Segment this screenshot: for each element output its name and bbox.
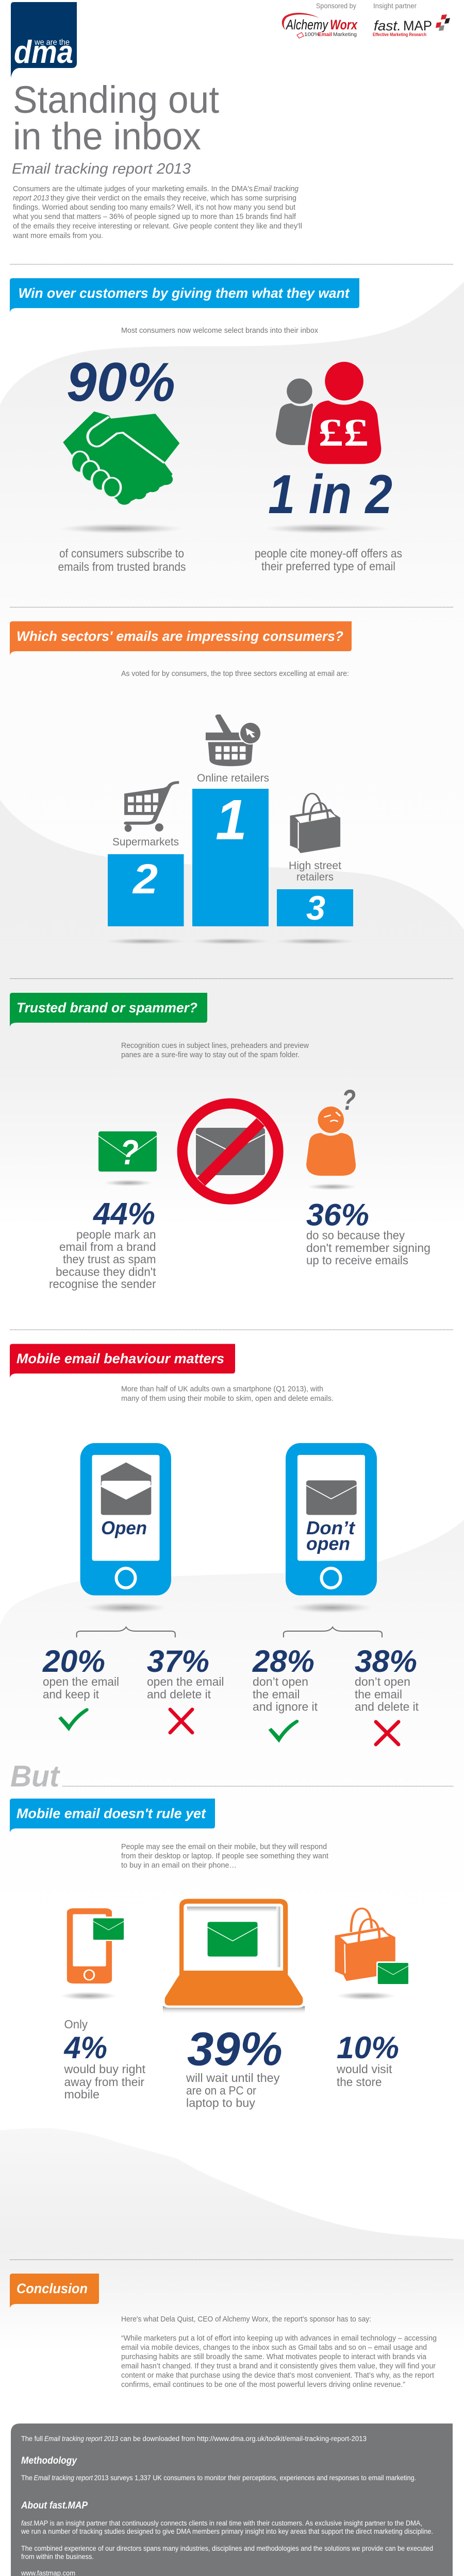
intro text: want more emails from you. bbox=[12, 232, 103, 240]
shadow under handshake bbox=[58, 523, 184, 534]
methodology: Email tracking report bbox=[34, 2474, 93, 2482]
title bbox=[13, 78, 219, 158]
sponsor: Alchemy Worx: 100% bbox=[304, 32, 320, 38]
stat: 38% bbox=[355, 1644, 419, 1714]
icon: confused person bbox=[306, 1083, 356, 1176]
about fast.MAP: from within the business. bbox=[21, 2553, 94, 2561]
background swoosh: lower bbox=[0, 1520, 464, 1932]
caption: 90%: of consumers subscribe to bbox=[59, 547, 184, 560]
logo: we are the dma: dma bbox=[14, 35, 73, 70]
stat: 44%: they trust as spam bbox=[63, 1252, 156, 1266]
icon: confused person: ? bbox=[342, 1083, 356, 1116]
title: Standing out bbox=[13, 78, 219, 121]
stat: 10%: would visit bbox=[336, 2062, 392, 2076]
section intro: recognition cues: panes are a sure-fire way to stay out of the spam folder. bbox=[121, 1051, 300, 1059]
stat: 36%: don't remember signing bbox=[306, 1241, 430, 1255]
conclusion quote: “While marketers put a lot of effort into keeping up with advances in email technology – accessing bbox=[121, 2334, 437, 2343]
phone shadows bbox=[85, 1602, 373, 1614]
section intro: smartphone bbox=[121, 1385, 334, 1403]
conclusion quote bbox=[121, 2315, 437, 2389]
stat: 38%: and delete it bbox=[355, 1700, 419, 1714]
label: high street retailers: High street bbox=[289, 860, 341, 872]
icon: handshake bbox=[63, 412, 179, 505]
background swoosh: top bbox=[0, 282, 464, 933]
stat: 37%: open the email bbox=[147, 1675, 224, 1688]
intro text: of the emails they receive interesting or relevant. Give people content they like and they'll bbox=[13, 223, 302, 231]
stat: 28%: 28% bbox=[252, 1644, 314, 1679]
phone: open bbox=[80, 1443, 171, 1596]
stat: 1 in 2: 1 in 2 bbox=[268, 463, 392, 525]
heading: trusted brand: Trusted brand or spammer? bbox=[16, 1000, 197, 1015]
icon: tick bbox=[269, 1720, 299, 1743]
methodology: 2013 surveys 1,337 UK consumers to monitor their perceptions, experiences and responses to email marketing. bbox=[94, 2474, 416, 2482]
section intro: smartphone: More than half of UK adults own a smartphone (Q1 2013), with bbox=[121, 1385, 323, 1393]
podium bar: 1 bbox=[192, 788, 269, 926]
stat: 36% bbox=[306, 1197, 430, 1267]
intro text: they give their verdict on the emails they receive, which has some surprising bbox=[51, 194, 296, 202]
stat: 44%: people mark an bbox=[76, 1228, 156, 1241]
heading: conclusion: Conclusion bbox=[16, 2281, 88, 2296]
sponsor: Alchemy Worx: Sponsored by bbox=[316, 2, 356, 10]
stat: 4%: mobile bbox=[64, 2088, 100, 2101]
logo: we are the dma: we are the bbox=[34, 38, 70, 47]
stat: 4%: 4% bbox=[64, 2030, 107, 2065]
stat: 28% bbox=[252, 1644, 318, 1714]
shadow under 1 in 2 bbox=[264, 523, 390, 534]
stat: 4%: away from their bbox=[64, 2075, 144, 2089]
icon: online basket bbox=[206, 715, 262, 766]
download note: can be downloaded from http://www.dma.org.uk/toolkit/email-tracking-report-2013 bbox=[120, 2435, 367, 2443]
partner: fast.MAP: MAP bbox=[403, 18, 432, 33]
conclusion quote: email hasn’t changed. If they trust a brand and it consistently gives them value, they will find your bbox=[121, 2362, 436, 2370]
stat: 20%: and keep it bbox=[43, 1688, 100, 1701]
conclusion quote: Here's what Dela Quist, CEO of Alchemy Worx, the report's sponsor has to say: bbox=[121, 2315, 371, 2324]
heading: which sectors bbox=[10, 621, 352, 655]
caption: 1 in 2: people cite money-off offers as bbox=[255, 547, 402, 560]
stat: 38%: 38% bbox=[355, 1644, 417, 1679]
section intro: most consumers: Most consumers now welcome select brands into their inbox bbox=[121, 327, 319, 335]
stat: 39%: are on a PC or bbox=[186, 2083, 256, 2097]
icon: orange phone with email bbox=[67, 1908, 125, 1984]
conclusion quote: content or make that purchase using the device that’s most convenient. That’s why, as the report bbox=[121, 2371, 435, 2380]
intro text: Email tracking bbox=[254, 185, 299, 193]
subtitle: Email tracking report 2013 bbox=[12, 161, 191, 177]
title: in the inbox bbox=[13, 115, 201, 158]
podium shadows bbox=[106, 938, 355, 945]
brace: open bbox=[77, 1627, 175, 1637]
about fast.MAP: we run a number of tracking studies designed to give DMA members primary insight into key areas that support the direct marketing discipline. bbox=[21, 2528, 433, 2535]
stat: 10%: 10% bbox=[337, 2030, 399, 2065]
heading: mobile email behaviour: Mobile email behaviour matters bbox=[16, 1351, 224, 1366]
caption: 90%: emails from trusted brands bbox=[58, 560, 186, 573]
stat: 38%: don’t open bbox=[355, 1675, 410, 1688]
label: online retailers: Online retailers bbox=[197, 772, 269, 784]
download note: The full bbox=[21, 2435, 43, 2443]
icon: people with pounds: ££ bbox=[318, 411, 369, 454]
methodology bbox=[21, 2455, 416, 2482]
partner: fast.MAP: Effective Marketing Research bbox=[373, 32, 426, 37]
heading: mobile email behaviour bbox=[10, 1344, 235, 1378]
icon: orange bag with email bbox=[335, 1908, 409, 1985]
label: high street retailers bbox=[289, 860, 341, 883]
partner: fast.MAP bbox=[373, 2, 450, 37]
about fast.MAP: fast bbox=[21, 2519, 32, 2527]
sponsor: Alchemy Worx: Worx bbox=[330, 17, 358, 32]
stat: 4% bbox=[63, 2018, 146, 2101]
sponsor: Alchemy Worx: Marketing bbox=[333, 32, 357, 38]
stat: 44%: 44% bbox=[93, 1196, 155, 1231]
sponsor: Alchemy Worx bbox=[282, 2, 358, 38]
shadow under phone bbox=[60, 1992, 117, 2000]
phone: don't open bbox=[286, 1443, 377, 1596]
icon: cross bbox=[376, 1722, 399, 1744]
section intro: people may see: to buy in an email on their phone… bbox=[121, 1861, 237, 1870]
stat: 28%: and ignore it bbox=[253, 1700, 318, 1714]
stat: 44%: because they didn't bbox=[56, 1265, 156, 1279]
stat: 37% bbox=[147, 1644, 224, 1701]
stat: 38%: the email bbox=[355, 1688, 402, 1701]
icon: cross bbox=[170, 1709, 192, 1733]
intro text: what you send that matters – 36% of people signed up to more than 15 brands find half bbox=[12, 213, 296, 221]
stat: 28%: don’t open bbox=[253, 1675, 308, 1688]
stat: 36%: 36% bbox=[306, 1197, 369, 1232]
label: supermarkets: Supermarkets bbox=[112, 836, 179, 848]
stat: 28%: the email bbox=[253, 1688, 300, 1701]
heading: win over customers: Win over customers by giving them what they want bbox=[19, 285, 350, 301]
stat: 4%: Only bbox=[64, 2018, 88, 2031]
about fast.MAP: The combined experience of our directors spans many industries, disciplines and methodologies and the solutions we provide can be executed bbox=[21, 2545, 433, 2552]
heading: But: But bbox=[10, 1760, 61, 1793]
caption: 1 in 2 bbox=[255, 547, 402, 573]
icon: shopping bag bbox=[290, 793, 340, 853]
stat: 10% bbox=[336, 2030, 399, 2089]
phone: open: Open bbox=[101, 1517, 147, 1538]
shadow under person bbox=[307, 1183, 357, 1190]
brace: don't open bbox=[284, 1627, 382, 1637]
stat: 36%: do so because they bbox=[306, 1228, 405, 1242]
icon: prohibited email bbox=[183, 1104, 278, 1199]
background swoosh: middle bbox=[0, 800, 464, 1236]
stat: 44%: email from a brand bbox=[59, 1240, 156, 1253]
background swoosh: conclusion bbox=[0, 2128, 464, 2349]
about fast.MAP: .MAP is an insight partner that continuously connects clients in real time with their customers. As exclusive insight partner to the DMA, bbox=[32, 2519, 422, 2527]
conclusion quote: purchasing habits are still broadly the same. What motivates people to interact with brands via bbox=[121, 2352, 427, 2361]
podium bar: 3: 3 bbox=[306, 889, 325, 927]
stat: 44% bbox=[49, 1196, 156, 1291]
section intro: smartphone: many of them using their mobile to skim, open and delete emails. bbox=[121, 1395, 334, 1403]
download note: Email tracking report 2013 bbox=[44, 2435, 118, 2443]
heading: conclusion bbox=[10, 2274, 99, 2308]
intro text: Consumers are the ultimate judges of your marketing emails. In the DMA's bbox=[13, 185, 253, 193]
section intro: people may see: from their desktop or laptop. If people see something they want bbox=[121, 1852, 328, 1860]
heading: trusted brand bbox=[10, 993, 207, 1027]
stat: 20% bbox=[42, 1644, 119, 1701]
about fast.MAP: About fast.MAP bbox=[21, 2500, 88, 2511]
stat: 39%: 39% bbox=[187, 2023, 283, 2075]
podium bar: 3 bbox=[277, 889, 353, 927]
label: high street retailers: retailers bbox=[296, 871, 334, 883]
stat: 10%: the store bbox=[337, 2075, 382, 2089]
shadow under bag bbox=[336, 1992, 396, 2000]
podium bar: 2: 2 bbox=[132, 856, 158, 903]
stat: 37%: 37% bbox=[147, 1644, 209, 1679]
stat: 37%: and delete it bbox=[147, 1688, 211, 1701]
icon: green envelope with question mark bbox=[98, 1131, 157, 1172]
phone: don't open: open bbox=[306, 1533, 350, 1554]
intro text bbox=[12, 185, 302, 240]
phone: don't open: Don’t bbox=[306, 1517, 356, 1538]
methodology: Methodology bbox=[21, 2455, 77, 2466]
about fast.MAP bbox=[21, 2500, 433, 2576]
section intro: voted: As voted for by consumers, the top three sectors excelling at email are: bbox=[121, 670, 349, 678]
panel: footer information bbox=[11, 2424, 453, 2576]
partner: fast.MAP: fast. bbox=[374, 18, 401, 33]
stat: 4%: would buy right bbox=[63, 2062, 146, 2076]
methodology: The bbox=[21, 2474, 32, 2482]
caption: 1 in 2: their preferred type of email bbox=[261, 560, 395, 573]
heading: win over customers bbox=[10, 278, 359, 312]
stat: 39%: laptop to buy bbox=[186, 2096, 256, 2109]
conclusion quote: email via mobile devices, changes to the inbox such as Gmail tabs and so on – email usage and bbox=[121, 2343, 427, 2352]
section intro: recognition cues bbox=[121, 1042, 309, 1059]
stat: 36%: up to receive emails bbox=[306, 1253, 408, 1267]
icon: shopping cart bbox=[124, 783, 179, 832]
conclusion quote: confirms, email continues to be one of the most powerful levers driving online revenue.” bbox=[121, 2380, 405, 2389]
heading: mobile email doesn't rule: Mobile email doesn't rule yet bbox=[16, 1806, 206, 1821]
caption: 90% bbox=[58, 547, 186, 573]
stat: 39%: will wait until they bbox=[186, 2071, 280, 2084]
partner: fast.MAP: Insight partner bbox=[373, 2, 417, 10]
intro text: findings. Worried about sending too many emails? Well, it's not how many you send but bbox=[13, 204, 295, 212]
podium bar: 1: 1 bbox=[216, 788, 247, 852]
section intro: recognition cues: Recognition cues in subject lines, preheaders and preview bbox=[121, 1042, 309, 1050]
section intro: people may see bbox=[121, 1843, 328, 1870]
stat: 90%: 90% bbox=[67, 351, 175, 413]
stat: 44%: recognise the sender bbox=[49, 1277, 156, 1291]
intro text: report 2013 bbox=[13, 194, 49, 202]
icon: tick bbox=[58, 1708, 89, 1731]
heading: which sectors: Which sectors' emails are impressing consumers? bbox=[16, 629, 343, 644]
stat: 20%: open the email bbox=[43, 1675, 119, 1688]
logo: we are the dma bbox=[11, 2, 77, 78]
shadow under green envelope bbox=[104, 1180, 153, 1186]
heading: mobile email doesn't rule bbox=[10, 1799, 215, 1833]
sponsor: Alchemy Worx: Email bbox=[318, 32, 332, 38]
sponsor: Alchemy Worx: Alchemy bbox=[285, 17, 328, 32]
stat: 39% bbox=[186, 2023, 283, 2109]
icon: laptop with email bbox=[163, 1899, 305, 2014]
icon: green envelope with question mark: ? bbox=[120, 1133, 139, 1172]
section intro: people may see: People may see the email on their mobile, but they will respond bbox=[121, 1843, 327, 1851]
stat: 20%: 20% bbox=[42, 1644, 105, 1679]
icon: people with pounds bbox=[276, 362, 381, 464]
podium bar: 2 bbox=[108, 854, 184, 926]
